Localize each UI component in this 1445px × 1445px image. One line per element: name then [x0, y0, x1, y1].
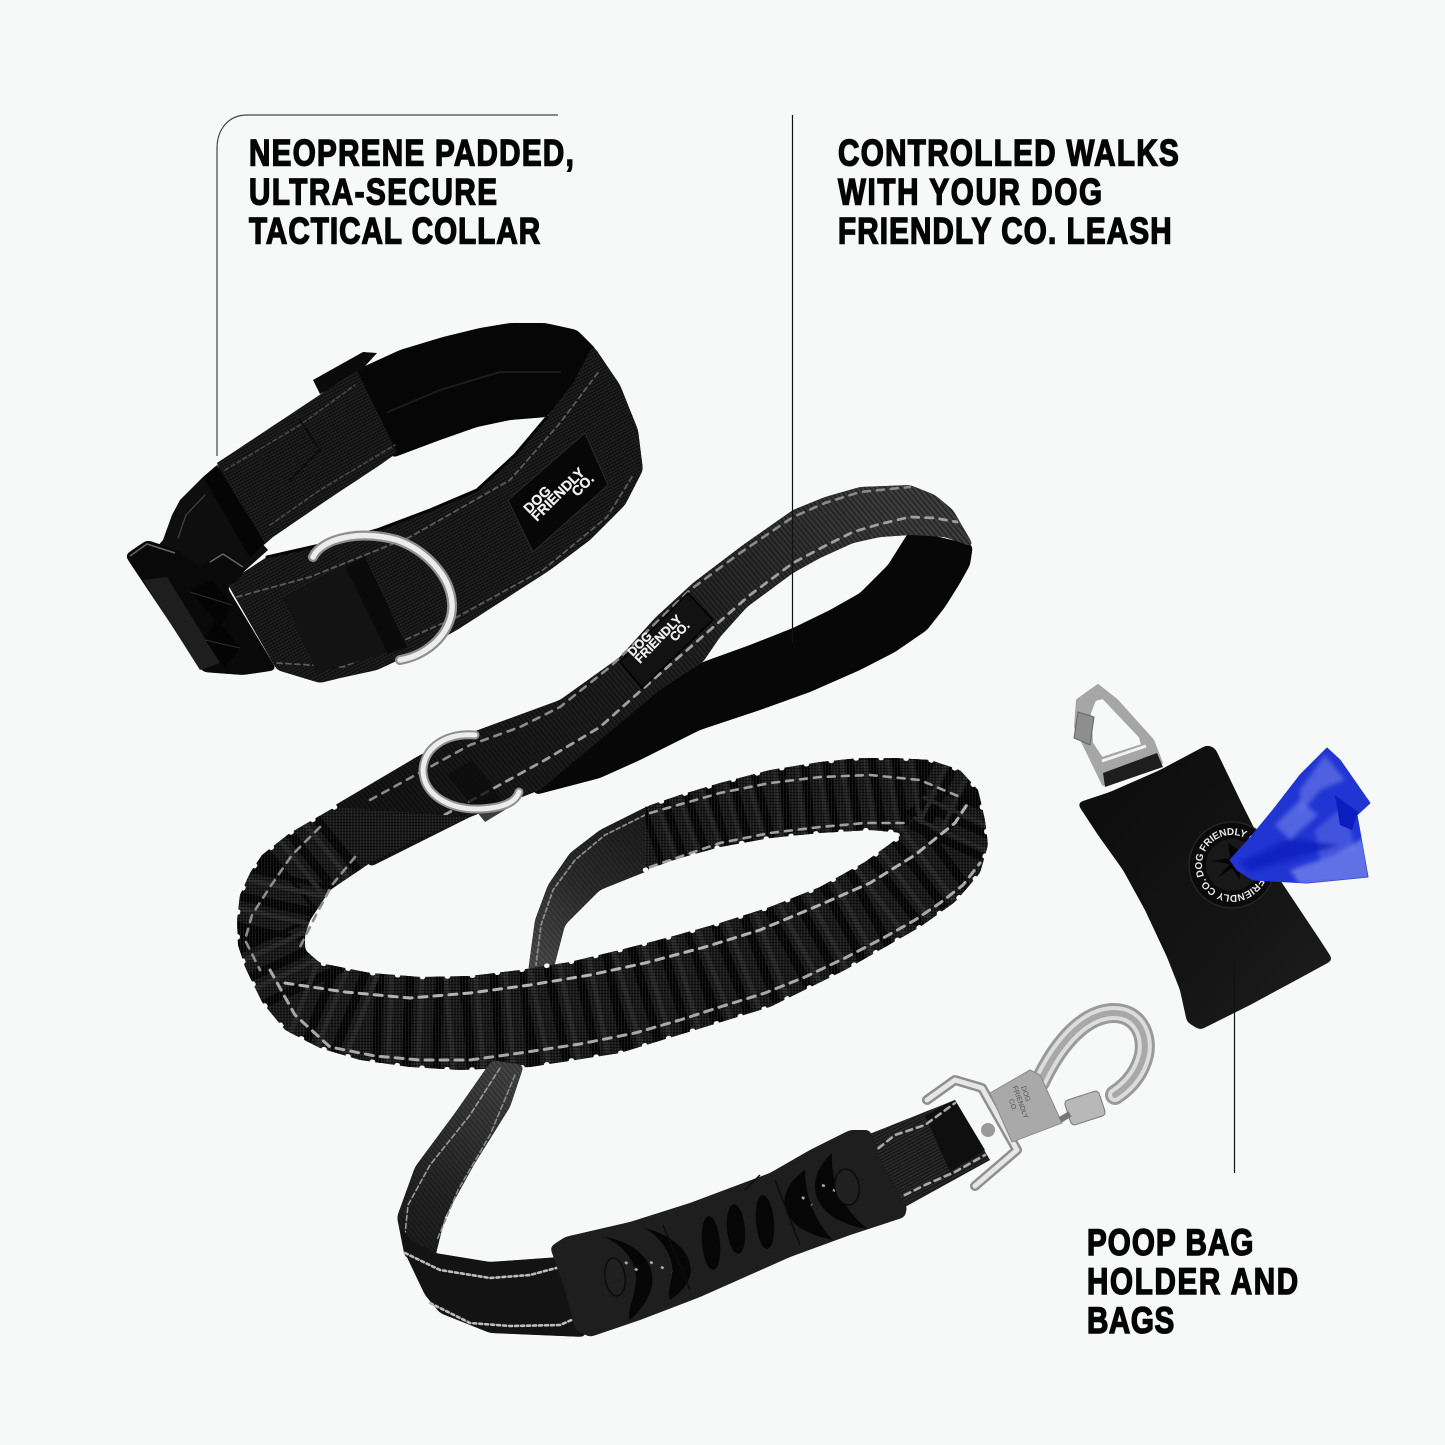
bungee stitching: upper outer — [650, 775, 960, 813]
D ring on leash — [423, 735, 519, 809]
poop bag holder — [1074, 684, 1370, 1029]
callout line: leash — [792, 115, 794, 643]
collar: logo tag: DOG — [520, 482, 554, 516]
snap hook — [981, 1013, 1145, 1142]
text block: leash: FRIENDLY CO. LEASH — [838, 211, 1172, 252]
callout line: poop bag holder — [1234, 962, 1236, 1173]
gate collar — [1064, 1090, 1106, 1126]
text block: poop bag holder: BAGS — [1087, 1301, 1174, 1342]
collar: front nylon band — [227, 345, 643, 683]
gray lower tail — [397, 1060, 524, 1258]
bungee section — [230, 750, 995, 1080]
handle logo tag: CO. — [667, 619, 693, 644]
text block: leash: WITH YOUR DOG — [838, 172, 1102, 213]
text block: collar — [249, 133, 574, 252]
bungee edge scallops — [237, 758, 988, 1070]
stitched box — [447, 760, 508, 822]
neoprene padding — [530, 530, 973, 795]
collar: neoprene inner lining — [352, 323, 597, 458]
collar: logo tag: FRIENDLY — [528, 464, 588, 524]
text block: leash — [838, 133, 1179, 252]
bottom stitching — [370, 517, 957, 853]
nylon webbing — [332, 485, 975, 867]
snap hook: DOG — [1019, 1085, 1031, 1103]
handle logo tag: DOG — [625, 629, 655, 659]
snap hook: CO. — [1007, 1098, 1018, 1112]
bungee pleats — [230, 750, 995, 1080]
bungee stitching: middle — [285, 800, 970, 998]
tail of leash behind bungee (upper) — [528, 805, 650, 975]
lower leash section — [397, 1013, 1145, 1337]
collar: logo tag: CO. — [568, 470, 597, 499]
black curved band — [397, 1217, 600, 1337]
text block: poop bag holder: HOLDER AND — [1087, 1262, 1298, 1303]
text block: collar: NEOPRENE PADDED, — [249, 133, 574, 174]
collar: black strap — [203, 465, 265, 558]
bungee stitching: left — [245, 827, 320, 970]
handle logo tag — [620, 593, 713, 688]
swivel rectangular ring — [927, 1080, 1017, 1186]
blue bag — [1230, 748, 1370, 885]
pouch — [1077, 745, 1333, 1030]
collar: back connector behind buckle — [150, 477, 268, 575]
collar: slider — [313, 352, 377, 394]
top stitching — [370, 487, 910, 800]
collar: ring tab fold — [283, 557, 407, 673]
text block: poop bag holder: POOP BAG — [1087, 1223, 1253, 1264]
text block: poop bag holder — [1087, 1223, 1298, 1342]
collar: D ring — [313, 536, 452, 660]
badge: DOG FRIENDLY CO. DOG FRIENDLY CO. — [1195, 828, 1265, 902]
snap hook: FRIENDLY — [1011, 1085, 1029, 1120]
bungee stitching: outer lower — [270, 863, 980, 1060]
collar: logo tag — [508, 433, 608, 552]
callout line: collar — [217, 115, 558, 456]
collar: back nylon webbing — [217, 370, 397, 557]
leash handle loop — [332, 485, 975, 867]
text block: collar: TACTICAL COLLAR — [249, 211, 540, 252]
strap past grip — [862, 1100, 990, 1207]
text block: leash: CONTROLLED WALKS — [838, 133, 1179, 174]
pouch strap — [1103, 753, 1163, 787]
bungee stitching: upper inner — [650, 823, 905, 867]
collar: metal buckle — [125, 540, 277, 675]
rubber grip — [550, 1130, 907, 1337]
handle logo tag: FRIENDLY — [632, 612, 685, 666]
carabiner — [1074, 685, 1162, 785]
text block: collar: ULTRA-SECURE — [249, 172, 497, 213]
grip cutouts — [605, 1153, 868, 1320]
collar — [125, 323, 643, 683]
